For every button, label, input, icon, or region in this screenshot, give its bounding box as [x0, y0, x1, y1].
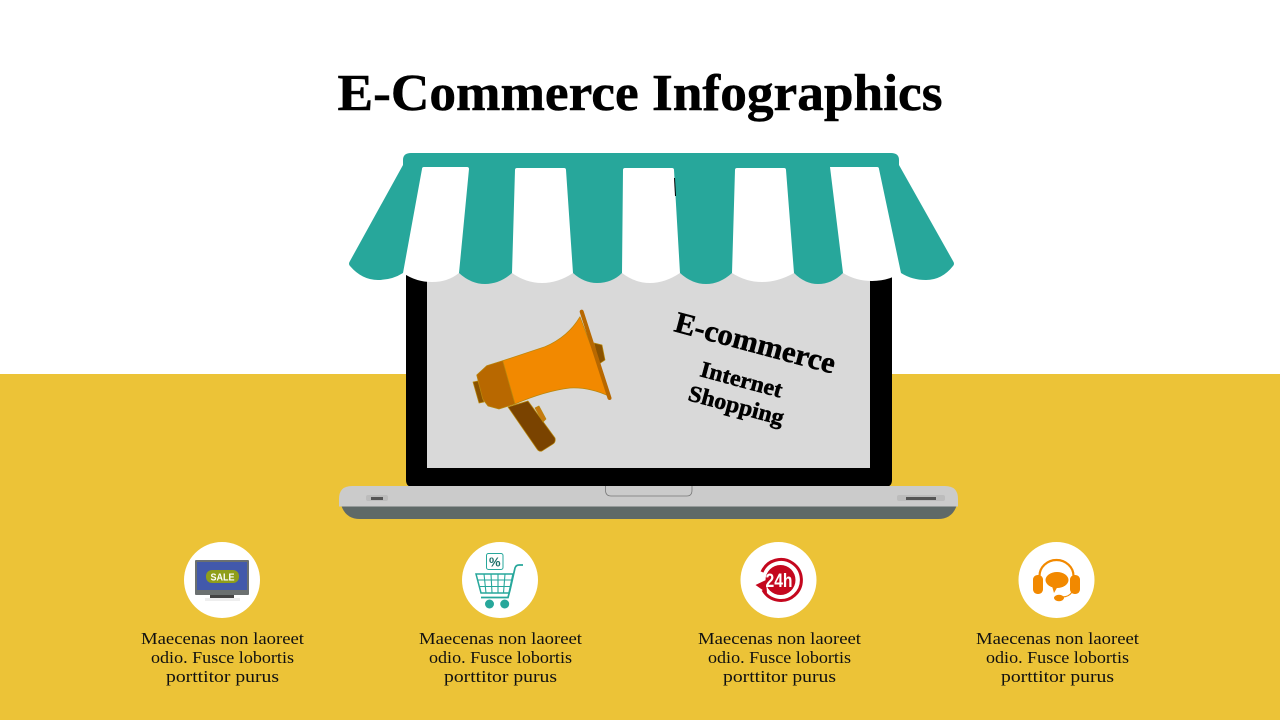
icon: shopping cart — [476, 554, 523, 608]
icon circle — [184, 542, 260, 618]
awning white stripe 5 — [830, 167, 901, 281]
screen text: Internet: Internet — [698, 357, 786, 403]
icon: megaphone — [473, 312, 610, 451]
description text: Maecenas non laoreet — [141, 629, 304, 648]
icon: sale monitor: SALE — [210, 572, 235, 584]
laptop screen bezel — [406, 262, 892, 487]
awning — [349, 153, 954, 284]
feature 4: customer service — [976, 542, 1139, 686]
feature 1: sale — [141, 542, 304, 686]
description text: odio. Fusce lobortis — [708, 648, 851, 667]
description text: porttitor purus — [723, 667, 836, 686]
icon circle — [462, 542, 538, 618]
description text: porttitor purus — [444, 667, 557, 686]
description text: Maecenas non laoreet — [419, 629, 582, 648]
description text: Maecenas non laoreet — [976, 629, 1139, 648]
feature 3: 24h support — [698, 542, 861, 686]
icon: 24h clock — [756, 559, 801, 600]
icon: shopping cart: % — [489, 554, 501, 570]
icon circle — [1018, 542, 1094, 618]
description text: odio. Fusce lobortis — [986, 648, 1129, 667]
screen text: Shopping: Shopping — [686, 381, 787, 430]
title: E-Commerce Infographics — [338, 65, 942, 122]
awning white stripe 3 — [622, 168, 680, 283]
feature 2: cart — [419, 542, 582, 686]
icon: 24h clock: 24h — [766, 571, 792, 592]
description text: porttitor purus — [166, 667, 279, 686]
screen heading: E-commerce: E-commerce — [671, 306, 839, 380]
awning white stripe 1 — [403, 167, 469, 282]
laptop illustration — [339, 262, 958, 519]
awning white stripe 2 — [512, 168, 573, 283]
awning white stripe 4 — [732, 168, 794, 282]
icon circle — [740, 542, 816, 618]
icon: sale monitor — [195, 560, 249, 601]
awning green canopy — [349, 153, 954, 284]
laptop screen — [427, 262, 870, 468]
description text: Maecenas non laoreet — [698, 629, 861, 648]
icon: headset — [1033, 560, 1080, 601]
description text: odio. Fusce lobortis — [151, 648, 294, 667]
laptop base — [339, 486, 958, 519]
description text: porttitor purus — [1001, 667, 1114, 686]
description text: odio. Fusce lobortis — [429, 648, 572, 667]
